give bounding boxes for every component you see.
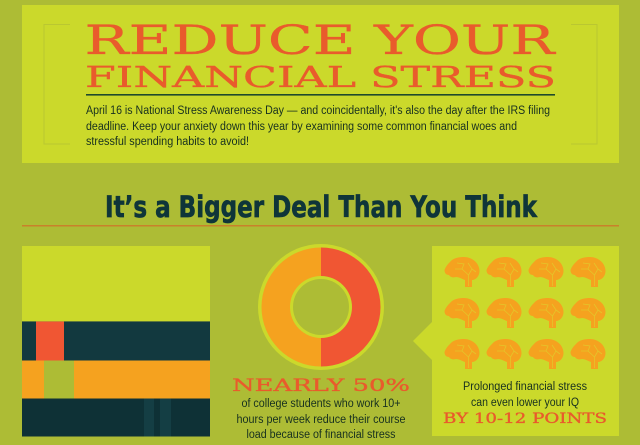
stat: nearly 50%: NEARLY 50%: [232, 376, 410, 396]
stat description: load because of financial stress: [246, 429, 396, 441]
panel: header: [22, 5, 619, 163]
stat: nearly 50%: [232, 376, 410, 441]
section heading: It’s a Bigger Deal Than You Think: [105, 190, 538, 224]
stat description: hours per week reduce their course: [236, 414, 406, 426]
intro text: stressful spending habits to avoid!: [86, 136, 249, 148]
stat description: of college students who work 10+: [242, 398, 401, 410]
donut chart: [258, 244, 384, 370]
icons: brains: [444, 257, 606, 369]
title line 2: FINANCIAL STRESS: [85, 60, 556, 94]
callout text: can even lower your IQ: [471, 397, 579, 409]
right bracket: [571, 24, 597, 144]
intro text: deadline. Keep your anxiety down this year by examining some common financial woes and: [86, 121, 517, 133]
panel: IQ callout: [413, 246, 619, 436]
callout text: [463, 381, 587, 409]
title rule: [86, 94, 555, 96]
title line 1: REDUCE YOUR: [84, 18, 557, 64]
left bracket: [44, 24, 70, 144]
panel: striped blocks: [22, 246, 210, 436]
intro text: [86, 105, 550, 148]
stat: 10-12 points: BY 10-12 POINTS: [443, 411, 607, 427]
stat description: [236, 398, 406, 441]
callout text: Prolonged financial stress: [463, 381, 587, 393]
section rule: [22, 225, 619, 226]
intro text: April 16 is National Stress Awareness Day — and coincidentally, it's also the day after the IRS filing: [86, 105, 550, 117]
